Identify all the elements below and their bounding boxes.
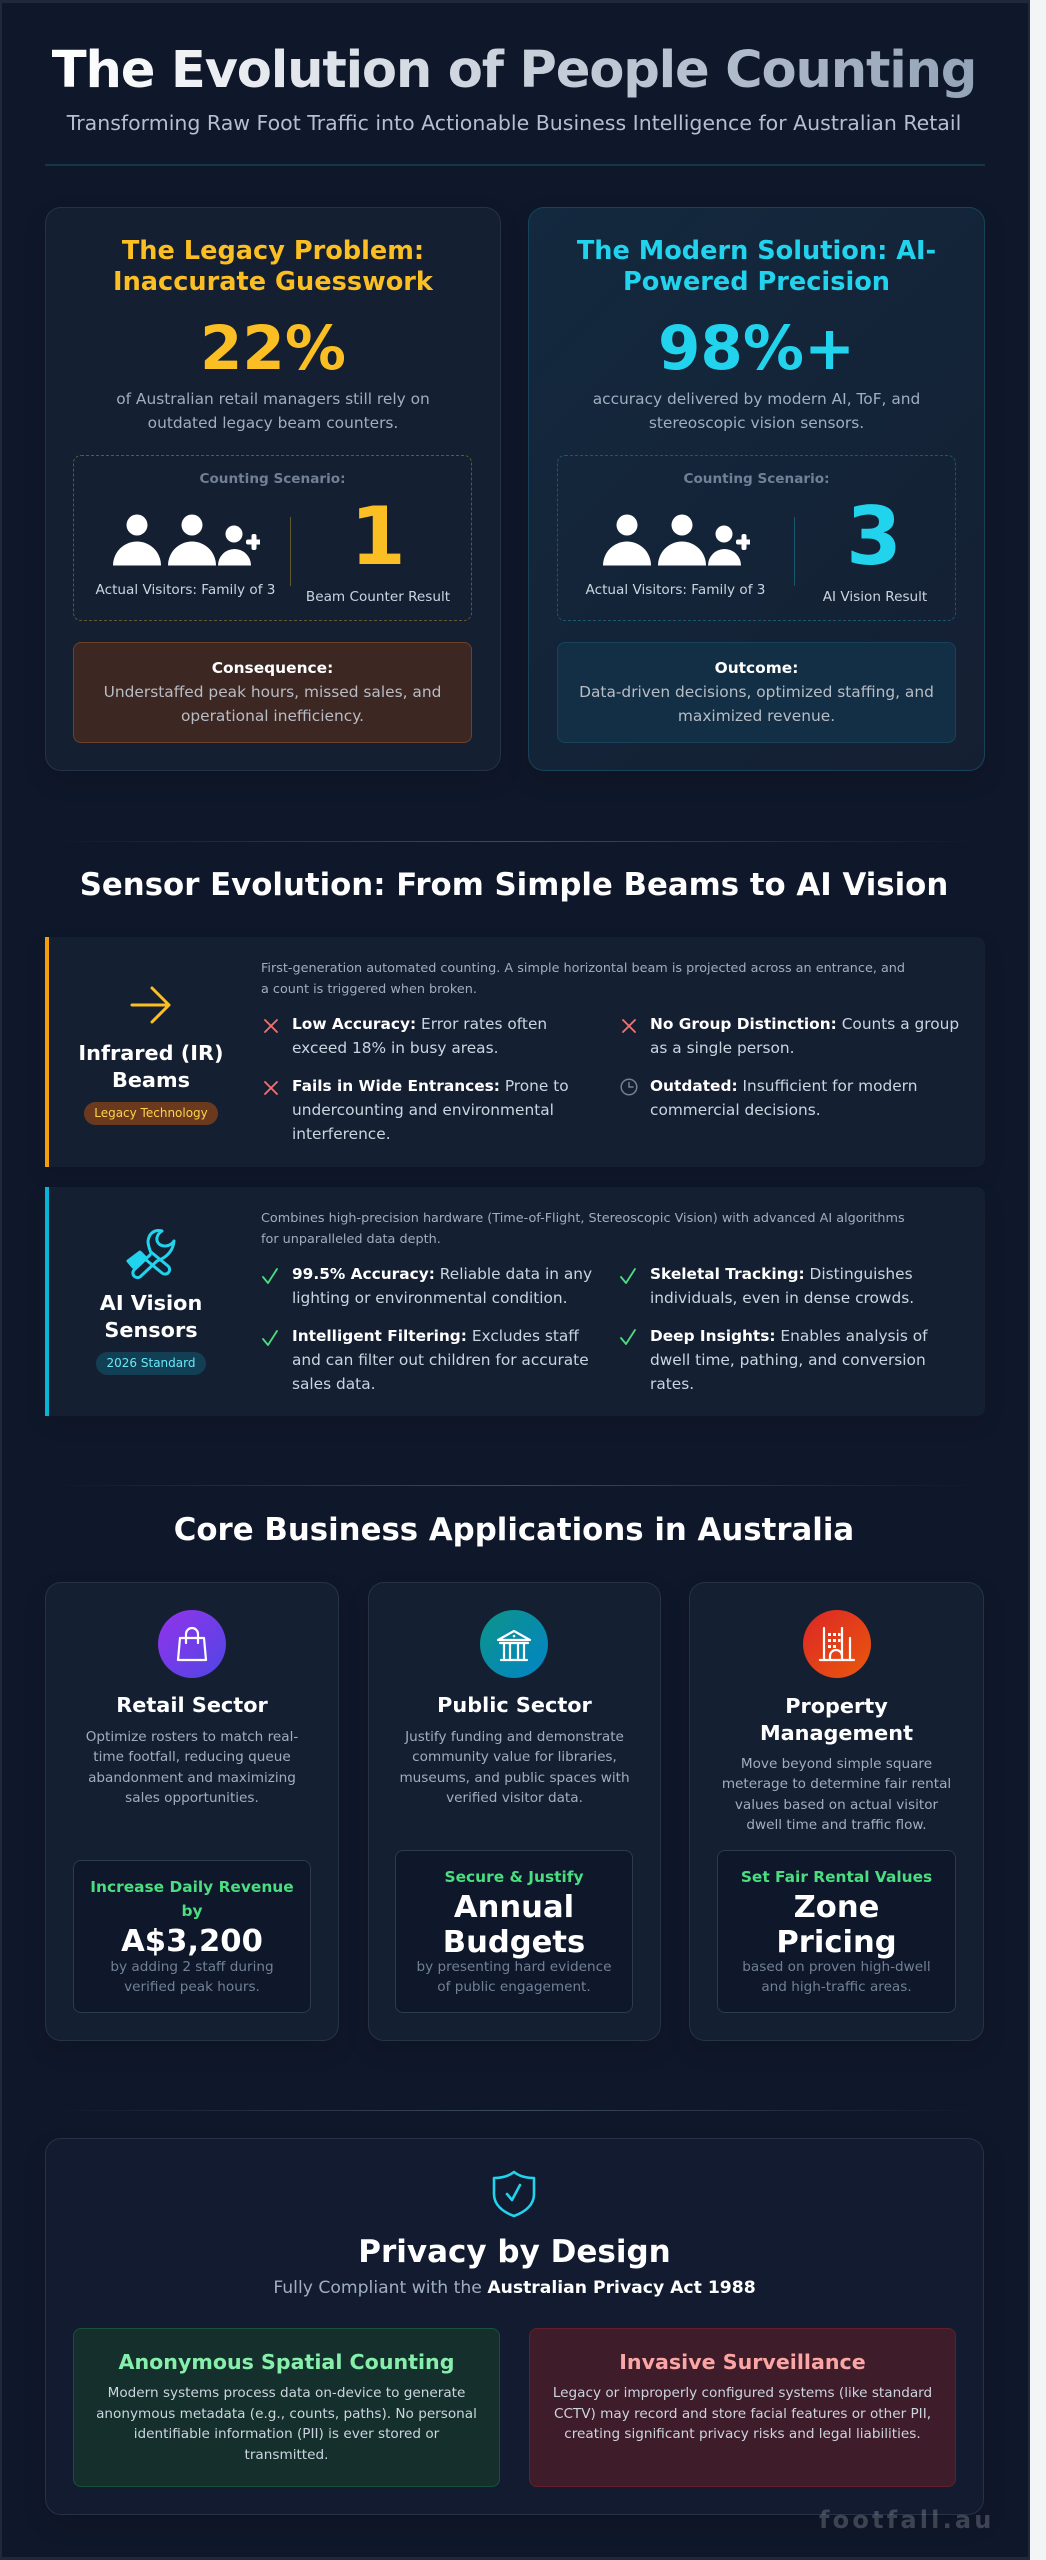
limitation: outdated bbox=[650, 1077, 917, 1119]
metric note: verified peak hours. bbox=[124, 1979, 260, 1995]
outcome text: Outcome: bbox=[715, 659, 798, 677]
card description: community value for libraries, bbox=[412, 1749, 617, 1765]
consequence text: Understaffed peak hours, missed sales, and bbox=[104, 683, 441, 701]
benefit: filtering: sales data. bbox=[292, 1375, 376, 1393]
card description bbox=[86, 1729, 298, 1806]
metric value bbox=[443, 1890, 585, 1960]
surveillance title: Invasive Surveillance bbox=[619, 2350, 866, 2374]
card title: Management bbox=[760, 1720, 913, 1744]
pill: 2026 standard bbox=[96, 1352, 206, 1375]
outcome callout bbox=[557, 642, 956, 743]
icon: buildings bbox=[803, 1610, 871, 1678]
metric label: Increase Daily Revenue bbox=[90, 1878, 294, 1896]
card description: dwell time and traffic flow. bbox=[746, 1817, 927, 1833]
stat: 22%: 22% bbox=[200, 313, 346, 384]
metric note: based on proven high-dwell bbox=[742, 1959, 931, 1975]
privacy title: Privacy by Design bbox=[358, 2234, 671, 2270]
benefit: filtering bbox=[292, 1327, 589, 1393]
sensor name: Infrared (IR) bbox=[78, 1040, 224, 1064]
benefit: filtering: and can filter out children for accurate bbox=[292, 1351, 589, 1369]
benefit: skeletal tracking bbox=[650, 1265, 914, 1307]
panel: modern solution bbox=[528, 207, 985, 771]
accent strip bbox=[45, 937, 49, 1167]
sensor name: Beams bbox=[112, 1068, 190, 1092]
metric: revenue bbox=[73, 1860, 311, 2013]
anonymous text bbox=[73, 2383, 500, 2465]
card description: museums, and public spaces with bbox=[399, 1770, 630, 1786]
icon: cross bbox=[622, 1019, 636, 1033]
modern heading: The Modern Solution: AI- bbox=[577, 236, 936, 266]
card description: time footfall, reducing queue bbox=[93, 1749, 291, 1765]
sensor description bbox=[261, 1210, 905, 1246]
metric value: Zone bbox=[794, 1890, 879, 1924]
benefit: deep insights: rates. bbox=[650, 1375, 694, 1393]
header divider bbox=[45, 164, 985, 166]
benefit: deep insights: dwell time, pathing, and conversion bbox=[650, 1351, 926, 1369]
icon: arrow bbox=[130, 986, 171, 1024]
sensor description: First-generation automated counting. A simple horizontal beam is projected across an entrance, and bbox=[261, 960, 905, 976]
card description: Move beyond simple square bbox=[741, 1756, 932, 1772]
consequence text: Consequence: bbox=[212, 659, 333, 677]
card description: Optimize rosters to match real- bbox=[86, 1729, 298, 1745]
panel: legacy problem bbox=[45, 207, 501, 771]
consequence text: operational inefficiency. bbox=[181, 707, 364, 725]
card title: Retail Sector bbox=[116, 1692, 268, 1716]
panel: property management bbox=[689, 1582, 984, 2041]
outcome text bbox=[579, 659, 934, 725]
sensor description: Combines high-precision hardware (Time-of-Flight, Stereoscopic Vision) with advanced AI algorithms bbox=[261, 1210, 905, 1226]
panel: infrared beams bbox=[45, 937, 985, 1167]
benefit: accuracy: lighting or environmental condition. bbox=[292, 1289, 568, 1307]
icon: clock bbox=[620, 1078, 638, 1096]
limitation: wide entrances: undercounting and environmental bbox=[292, 1101, 554, 1119]
scenario label: Counting Scenario: bbox=[683, 471, 830, 487]
metric label: by bbox=[181, 1902, 203, 1920]
card description bbox=[399, 1729, 630, 1806]
benefit: deep insights: Deep Insights: Enables analysis of bbox=[650, 1327, 928, 1345]
stat description bbox=[593, 390, 920, 432]
surveillance text: creating significant privacy risks and legal liabilities. bbox=[564, 2426, 921, 2442]
card description: abandonment and maximizing bbox=[88, 1770, 296, 1786]
stat: 98%+: 98%+ bbox=[658, 313, 855, 384]
heading: core applications: Core Business Applications in Australia bbox=[174, 1512, 854, 1548]
limitation: outdated: Outdated: Insufficient for modern bbox=[650, 1077, 917, 1095]
card description: meterage to determine fair rental bbox=[722, 1776, 951, 1792]
benefit: skeletal tracking: Skeletal Tracking: Distinguishes bbox=[650, 1265, 913, 1283]
metric value: Annual bbox=[454, 1890, 574, 1924]
limitation: wide entrances: interference. bbox=[292, 1125, 391, 1143]
sensor name: Sensors bbox=[104, 1318, 198, 1342]
limitation: outdated: commercial decisions. bbox=[650, 1101, 821, 1119]
benefit: accuracy: 99.5% Accuracy: Reliable data in any bbox=[292, 1265, 592, 1283]
pill: legacy technology bbox=[84, 1102, 218, 1125]
icon: civic building bbox=[480, 1610, 548, 1678]
benefit: deep insights bbox=[650, 1327, 928, 1393]
metric value: A$3,200 bbox=[121, 1924, 263, 1959]
actual visitors label: Actual Visitors: Family of 3 bbox=[586, 582, 765, 598]
scenario label: Counting Scenario: bbox=[199, 471, 346, 487]
outcome text: Data-driven decisions, optimized staffing, and bbox=[579, 683, 934, 701]
panel: anonymous counting bbox=[73, 2328, 500, 2487]
consequence text bbox=[104, 659, 441, 725]
outcome text: maximized revenue. bbox=[678, 707, 835, 725]
metric: pricing bbox=[717, 1850, 956, 2013]
metric note: by adding 2 staff during bbox=[110, 1959, 274, 1975]
stat description bbox=[116, 390, 430, 432]
icon: shield bbox=[491, 2170, 537, 2218]
metric: budgets bbox=[395, 1850, 633, 2013]
pill: legacy technology: Legacy Technology bbox=[94, 1106, 208, 1120]
metric label bbox=[90, 1878, 294, 1920]
card description bbox=[722, 1756, 951, 1833]
scenario separator bbox=[290, 517, 291, 586]
anonymous text: Modern systems process data on-device to generate bbox=[108, 2385, 465, 2401]
panel: AI vision sensors bbox=[45, 1187, 985, 1416]
icon: tools bbox=[126, 1229, 176, 1280]
metric value bbox=[776, 1890, 897, 1960]
benefit: accuracy bbox=[292, 1265, 592, 1307]
AI count result: 3 bbox=[846, 490, 902, 583]
counting scenario: AI bbox=[557, 455, 956, 621]
anonymous text: identifiable information (PII) is ever stored or bbox=[134, 2426, 439, 2442]
card title: Property bbox=[785, 1694, 888, 1718]
metric note bbox=[110, 1959, 274, 1995]
panel: invasive surveillance bbox=[529, 2328, 956, 2487]
metric note bbox=[717, 1957, 956, 1998]
legacy heading: Inaccurate Guesswork bbox=[113, 266, 433, 296]
icon: shopping bag bbox=[158, 1610, 226, 1678]
limitation: group distinction: No Group Distinction: Counts a group bbox=[650, 1015, 959, 1033]
modern heading bbox=[577, 236, 936, 296]
sensor description: for unparalleled data depth. bbox=[261, 1232, 441, 1246]
anonymous text: anonymous metadata (e.g., counts, paths). No personal bbox=[96, 2406, 477, 2422]
card title bbox=[760, 1694, 913, 1744]
metric note: of public engagement. bbox=[437, 1979, 591, 1995]
metric note: by presenting hard evidence bbox=[417, 1959, 611, 1975]
anonymous title: Anonymous Spatial Counting bbox=[119, 2350, 454, 2374]
icon: family of three bbox=[603, 514, 750, 566]
panel: privacy by design bbox=[45, 2138, 984, 2515]
AI vision label: AI Vision Result bbox=[823, 589, 927, 605]
panel: public sector bbox=[368, 1582, 661, 2041]
panel: retail sector bbox=[45, 1582, 339, 2041]
consequence callout bbox=[73, 642, 472, 743]
card description: sales opportunities. bbox=[125, 1790, 259, 1806]
icon: check bbox=[262, 1330, 278, 1346]
sensor description: a count is triggered when broken. bbox=[261, 982, 477, 996]
card description: verified visitor data. bbox=[446, 1790, 583, 1806]
limitation: wide entrances bbox=[292, 1077, 569, 1143]
legacy heading bbox=[113, 236, 434, 296]
card description: Justify funding and demonstrate bbox=[405, 1729, 624, 1745]
icon: check bbox=[620, 1329, 636, 1345]
benefit: skeletal tracking: individuals, even in dense crowds. bbox=[650, 1289, 914, 1307]
surveillance text: Legacy or improperly configured systems (like standard bbox=[553, 2385, 932, 2401]
pill: 2026 standard: 2026 Standard bbox=[107, 1356, 195, 1370]
limitation: group distinction: as a single person. bbox=[650, 1039, 794, 1057]
accent strip bbox=[45, 1187, 49, 1416]
sensor name: AI Vision bbox=[100, 1290, 202, 1314]
subtitle: Transforming Raw Foot Traffic into Actionable Business Intelligence for Australian Retail bbox=[67, 111, 961, 135]
stat description: outdated legacy beam counters. bbox=[148, 414, 398, 432]
beam counter label: Beam Counter Result bbox=[306, 589, 450, 605]
icon: check bbox=[262, 1268, 278, 1284]
scenario separator bbox=[794, 517, 795, 586]
modern heading: Powered Precision bbox=[623, 266, 890, 296]
limitation: low accuracy: exceed 18% in busy areas. bbox=[292, 1039, 498, 1057]
icon: cross bbox=[264, 1081, 278, 1095]
title: The Evolution of People Counting bbox=[52, 40, 976, 100]
sensor name bbox=[78, 1040, 224, 1092]
sensor name bbox=[100, 1290, 202, 1342]
legacy heading: The Legacy Problem: bbox=[122, 236, 424, 266]
card description: values based on actual visitor bbox=[735, 1797, 938, 1813]
beam count result: 1 bbox=[350, 490, 406, 583]
metric note bbox=[417, 1959, 611, 1995]
surveillance text: CCTV) may record and store facial features or other PII, bbox=[554, 2406, 931, 2422]
benefit: filtering: Intelligent Filtering: Excludes staff bbox=[292, 1327, 579, 1345]
privacy subtitle: Fully Compliant with the Australian Privacy Act 1988 bbox=[273, 2278, 756, 2298]
metric note: and high-traffic areas. bbox=[761, 1979, 912, 1995]
anonymous text: transmitted. bbox=[245, 2446, 328, 2462]
metric value: Budgets bbox=[443, 1924, 585, 1960]
stat description: accuracy delivered by modern AI, ToF, and bbox=[593, 390, 920, 408]
icon: check bbox=[620, 1268, 636, 1284]
limitation: wide entrances: Fails in Wide Entrances: Prone to bbox=[292, 1077, 569, 1095]
actual visitors label: Actual Visitors: Family of 3 bbox=[96, 582, 275, 598]
limitation: low accuracy: Low Accuracy: Error rates often bbox=[292, 1015, 547, 1033]
limitation: low accuracy bbox=[292, 1015, 547, 1057]
card title: Public Sector bbox=[437, 1692, 592, 1716]
watermark: footfall.au bbox=[819, 2506, 995, 2534]
limitation: group distinction bbox=[650, 1015, 959, 1057]
heading: sensor evolution: Sensor Evolution: From Simple Beams to AI Vision bbox=[80, 867, 948, 903]
icon: family of three bbox=[113, 514, 260, 566]
stat description: of Australian retail managers still rely on bbox=[116, 390, 430, 408]
counting scenario: legacy bbox=[73, 455, 472, 621]
sensor description bbox=[261, 960, 905, 996]
stat description: stereoscopic vision sensors. bbox=[649, 414, 864, 432]
surveillance text bbox=[529, 2383, 956, 2444]
metric label: Set Fair Rental Values bbox=[741, 1868, 932, 1886]
metric value: Pricing bbox=[776, 1924, 897, 1960]
icon: cross bbox=[264, 1019, 278, 1033]
metric label: Secure & Justify bbox=[444, 1868, 583, 1886]
